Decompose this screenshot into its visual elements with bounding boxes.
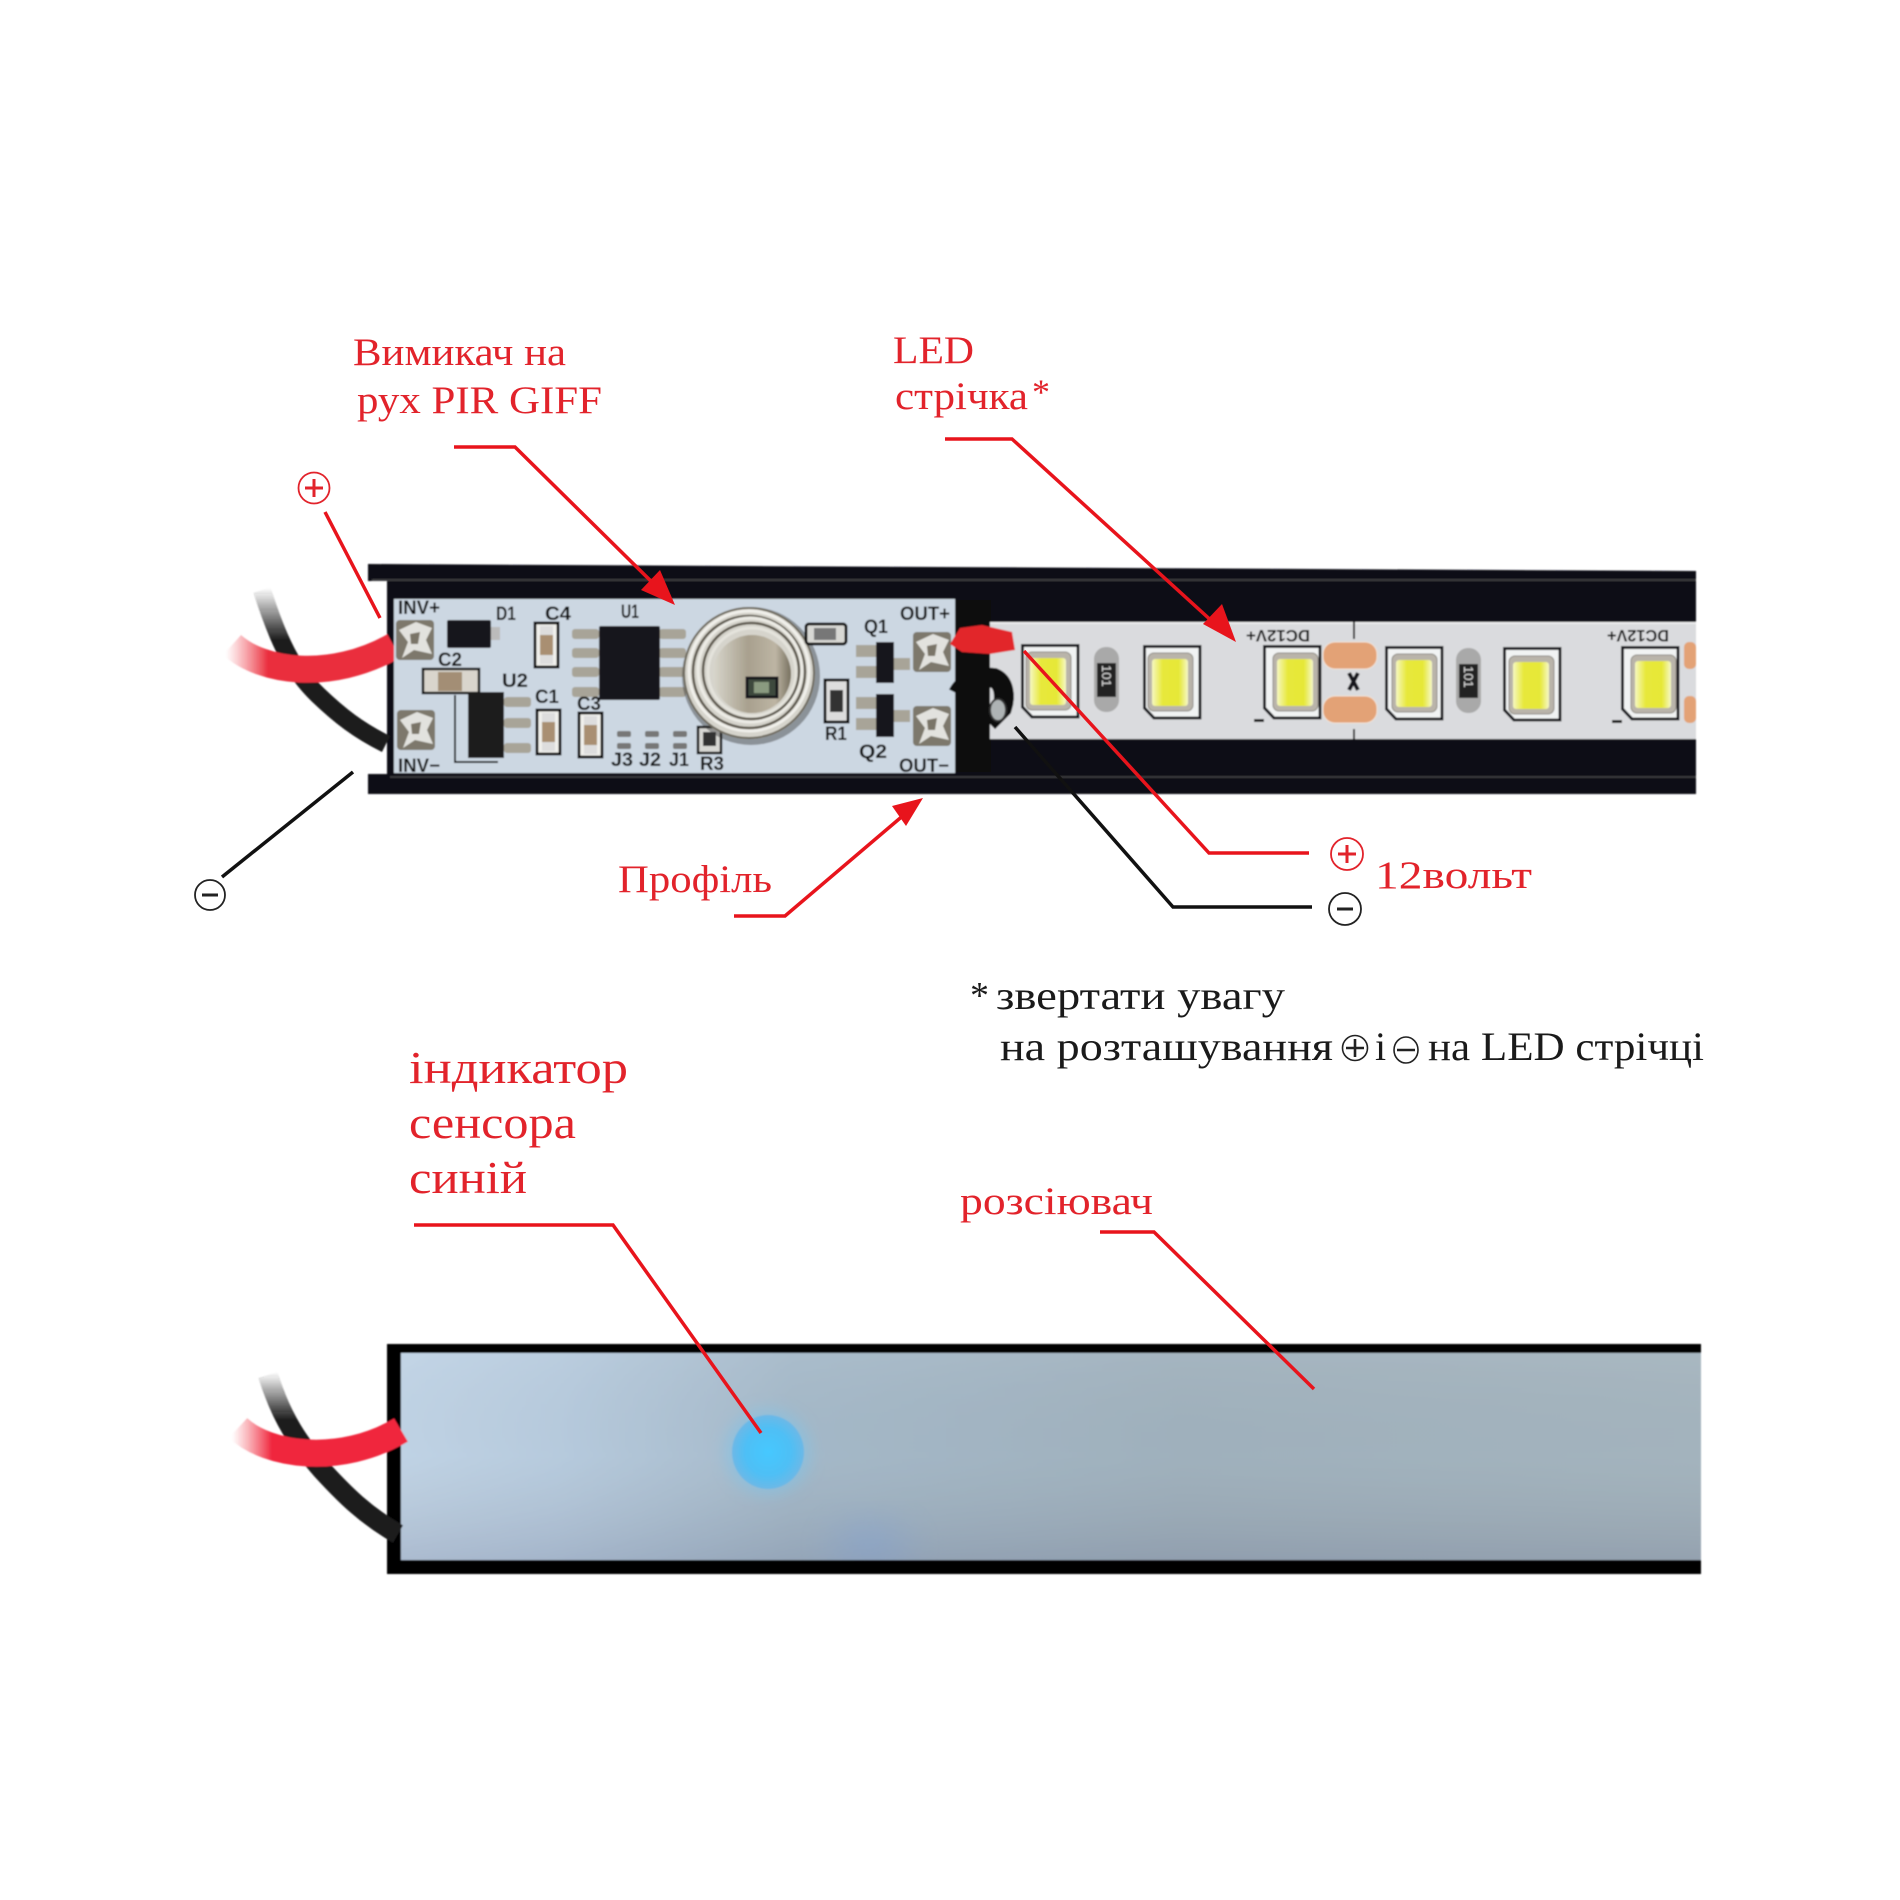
- PCB silkscreen labels: U2: [502, 671, 528, 692]
- label: profile: Профіль: [618, 858, 772, 901]
- PCB silkscreen labels: Q1: [864, 617, 888, 638]
- capacitor C3: [579, 713, 602, 757]
- PCB silkscreen labels: OUT+: [900, 604, 950, 625]
- note about polarity: звертати увагу: [996, 973, 1285, 1018]
- motion switch PCB: [394, 598, 955, 777]
- LED strip: [990, 622, 1696, 739]
- capacitor C1: [537, 710, 560, 754]
- label: LED strip: LED: [893, 329, 974, 372]
- copper pad lower: [1323, 696, 1377, 723]
- resistor 101 second: 101: [1461, 666, 1476, 688]
- output wires: [950, 625, 1015, 722]
- PCB silkscreen labels: R1: [825, 724, 847, 745]
- PCB silkscreen labels: R3: [700, 754, 724, 775]
- note about polarity: [970, 973, 1704, 1069]
- PCB silkscreen labels: J3: [611, 750, 633, 771]
- minus output marker: [1329, 893, 1361, 925]
- copper pad upper: [1323, 642, 1377, 669]
- minus input marker: [195, 880, 225, 910]
- scissors mark: [1349, 673, 1358, 690]
- arrow: profile: [734, 798, 923, 916]
- input wires: [232, 590, 394, 744]
- solder pad OUT+: [913, 632, 951, 672]
- polarity label: DC12V+: [1246, 626, 1310, 645]
- LED 2: [1144, 646, 1200, 718]
- note plus icon: [1342, 1036, 1368, 1060]
- line: sensor indicator: [414, 1225, 761, 1433]
- capacitor C4: [535, 623, 558, 667]
- label: sensor indicator: синій: [409, 1152, 527, 1203]
- capacitor C2: [423, 669, 479, 693]
- PCB silkscreen labels: J1: [669, 750, 689, 771]
- plus output marker: [1331, 838, 1363, 870]
- line: minus input: [222, 772, 353, 877]
- PCB silkscreen labels: C3: [577, 694, 601, 715]
- PCB silkscreen labels: D1: [496, 604, 516, 625]
- polarity label second: DC12V+: [1607, 626, 1669, 645]
- solder pad INV-: [397, 710, 435, 750]
- component top right: [806, 624, 846, 644]
- PCB silkscreen labels: J2: [639, 750, 661, 771]
- note about polarity: *: [970, 975, 989, 1017]
- plus input marker: [298, 472, 330, 504]
- blue sensor indicator: [726, 1410, 810, 1494]
- line: diffuser: [1100, 1232, 1314, 1389]
- note about polarity: і: [1375, 1024, 1386, 1069]
- PCB silkscreen labels: C4: [545, 604, 571, 625]
- label: switch name: Вимикач на: [353, 331, 566, 374]
- chip U1: [572, 626, 686, 700]
- panel: bottom photo, profile with diffuser: [238, 1344, 1701, 1574]
- label: switch name: рух PIR GIFF: [357, 379, 602, 422]
- spring sensor: [682, 607, 820, 745]
- transistor Q1: [856, 642, 910, 683]
- panel: top photo, open profile with PCB and LED strip: [232, 564, 1696, 794]
- input wires: [238, 1375, 401, 1534]
- black profile frame: [387, 1344, 1701, 1574]
- transistor Q2: [856, 694, 910, 737]
- LED 5: [1504, 648, 1560, 720]
- PCB silkscreen labels: Q2: [859, 742, 887, 763]
- PCB silkscreen labels: C1: [535, 687, 559, 708]
- label: 12 volt: 12вольт: [1375, 854, 1532, 897]
- resistor 101: [1094, 647, 1119, 712]
- PCB silkscreen labels: INV+: [398, 598, 440, 619]
- solder pad INV+: [396, 620, 434, 660]
- note minus icon: [1394, 1037, 1418, 1063]
- resistor R3: [698, 727, 721, 753]
- LED 3: [1264, 646, 1320, 718]
- regulator U2: [455, 692, 531, 762]
- note about polarity: на LED стрічці: [1428, 1024, 1704, 1069]
- resistor 101: 101: [1099, 665, 1114, 687]
- label: sensor indicator: [409, 1042, 628, 1203]
- resistor R1: [825, 680, 848, 722]
- PCB silkscreen labels: INV−: [398, 756, 440, 777]
- resistor 101 second: [1456, 648, 1481, 713]
- label: LED strip: *: [1032, 372, 1050, 412]
- arrow: LED strip: [945, 439, 1236, 642]
- label: sensor indicator: індикатор: [409, 1042, 628, 1093]
- solder pad OUT-: [913, 706, 951, 746]
- PCB silkscreen labels: C2: [438, 650, 462, 671]
- diffuser: [401, 1353, 1701, 1567]
- label: diffuser: розсіювач: [960, 1180, 1153, 1223]
- jumpers J1 to J3: [617, 731, 687, 749]
- arrow: switch: [454, 447, 675, 605]
- aluminium profile: [368, 564, 1696, 794]
- line: 12 volt minus: [1015, 727, 1312, 907]
- line: plus input: [325, 512, 380, 618]
- diode D1: [447, 620, 500, 648]
- label: switch name: [353, 331, 602, 422]
- LED 6: [1622, 648, 1678, 719]
- note about polarity: на розташування: [1000, 1024, 1333, 1069]
- label: sensor indicator: сенсора: [409, 1097, 576, 1148]
- PCB silkscreen labels: [398, 598, 950, 777]
- copper pads at edge: [1684, 642, 1696, 723]
- LED 1: [1022, 646, 1078, 717]
- line: 12 volt plus: [1024, 651, 1309, 853]
- LED 4: [1386, 648, 1442, 719]
- PCB silkscreen labels: OUT−: [899, 756, 949, 777]
- label: LED strip: стрічка: [895, 375, 1028, 418]
- label: LED strip: [893, 329, 1050, 418]
- PCB silkscreen labels: U1: [621, 602, 639, 623]
